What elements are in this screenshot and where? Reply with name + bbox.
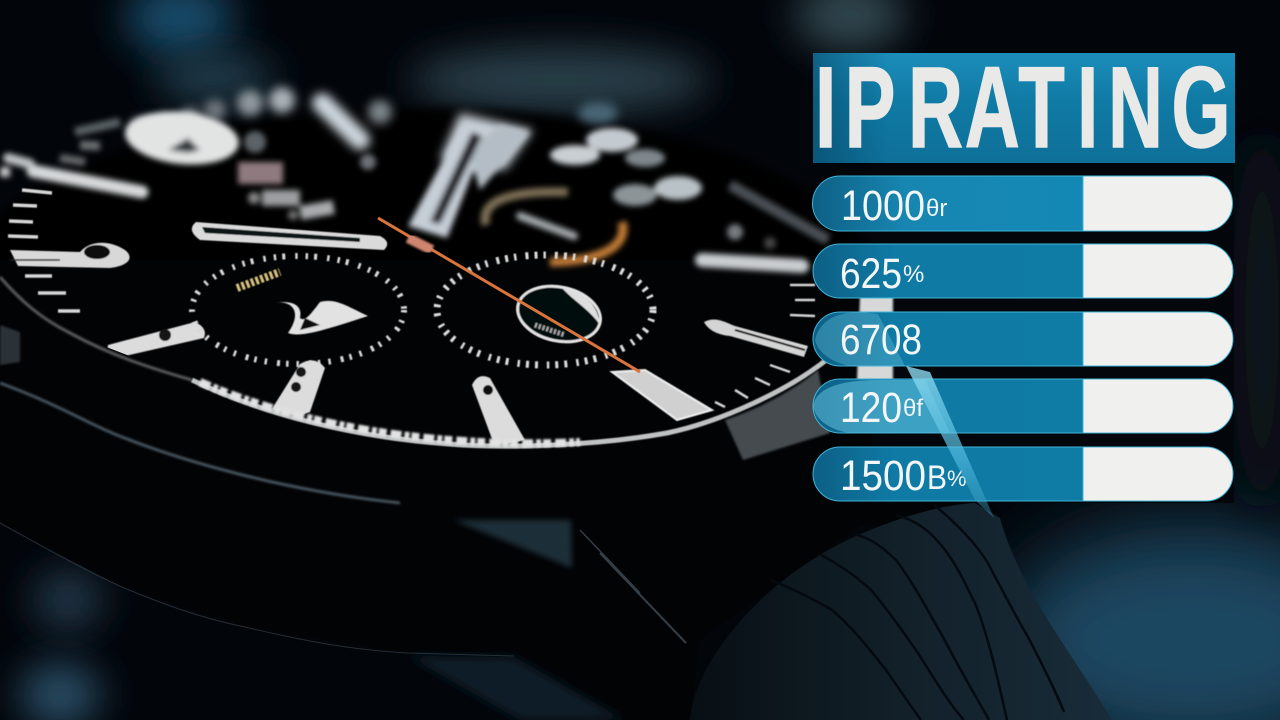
bar 1 label: θr xyxy=(926,195,947,222)
watch case and lug xyxy=(0,260,1000,720)
bar 4 xyxy=(813,379,1233,433)
lug panel highlight xyxy=(453,520,572,568)
watch dial xyxy=(0,87,828,447)
bar 3 label: 6708 xyxy=(840,316,922,364)
bar 1 xyxy=(812,176,1232,231)
lug edge lines xyxy=(0,523,686,656)
silver bezel spike behind bars xyxy=(857,296,893,380)
dial: lower markers xyxy=(270,285,815,447)
dial: orange second hand xyxy=(378,218,640,372)
bar 5 label: % xyxy=(947,466,967,491)
dial: blurred far markers xyxy=(0,106,828,266)
watch dial base xyxy=(0,108,875,452)
bar 5 xyxy=(813,447,1233,501)
title text: IP RATING xyxy=(815,43,1231,172)
bar 4 label: 120 xyxy=(840,384,902,432)
bar 2 xyxy=(813,244,1233,298)
dial: left marker and tick scale xyxy=(8,190,205,356)
dial: right subdial with ring xyxy=(437,255,653,365)
watch strap with ribs xyxy=(690,503,1112,720)
title banner xyxy=(813,43,1235,172)
bar 4 label: θf xyxy=(903,395,923,422)
dial: top hand marker xyxy=(408,125,530,238)
dial: left subdial with moon emblem xyxy=(192,256,404,364)
dial: far out-of-focus top markers xyxy=(130,87,618,170)
case side highlight xyxy=(0,383,400,503)
bar 5 label: 1500 xyxy=(840,452,926,500)
bar 5 label: B xyxy=(927,459,947,497)
bar 2 label: 625 xyxy=(840,250,902,298)
case lower wedge highlight xyxy=(408,656,625,720)
bar 2 label: % xyxy=(903,261,924,288)
glass refraction wedge across bars xyxy=(906,366,994,518)
bar 3 xyxy=(813,312,1233,366)
dark backing behind bars xyxy=(872,163,1234,503)
bezel rim xyxy=(0,277,830,460)
dial: long hour marker xyxy=(192,222,387,250)
bar 1 label: 1000 xyxy=(841,182,925,230)
